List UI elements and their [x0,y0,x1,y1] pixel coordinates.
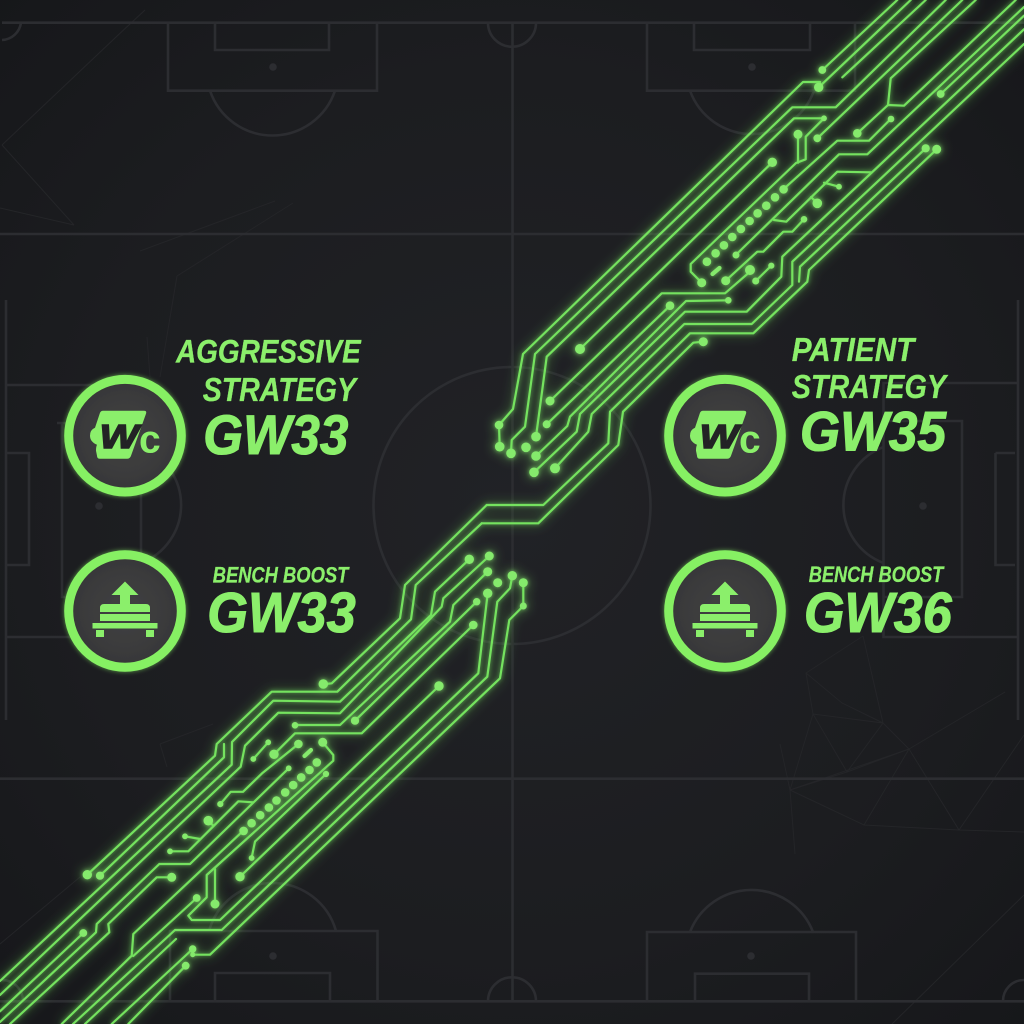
heading: strategy: STRATEGY [792,368,949,405]
icon: wildcard badge right: c [739,419,761,462]
icon: wildcard badge right [669,379,781,492]
icon: bench boost right [669,555,781,667]
value: GW33 bench boost: GW33 [207,581,356,645]
value: GW35 wildcard: GW35 [800,400,947,462]
icon: wildcard badge left: W [100,418,142,455]
panel: aggressive bench boost [69,555,356,667]
heading: patient: PATIENT [792,331,917,368]
value: GW36 bench boost: GW36 [804,581,952,645]
icon: wildcard badge left: c [139,419,161,462]
upper right circuit nodes [495,67,944,477]
heading: aggressive: AGGRESSIVE [175,334,362,370]
upper right circuit traces [482,0,1024,523]
label: bench boost: BENCH BOOST [809,562,945,587]
icon: bench boost left [69,555,181,667]
label: bench boost: BENCH BOOST [213,562,350,588]
pitch penalty spots [95,63,927,960]
icon: wildcard badge right: W [700,418,742,455]
icon: wildcard badge left [69,379,181,492]
lower left circuit traces [0,505,523,1024]
panel: aggressive strategy wildcard [69,334,362,492]
heading: strategy: STRATEGY [203,371,359,408]
panel: patient bench boost [669,555,952,667]
value: GW33 wildcard: GW33 [203,403,348,466]
lower left circuit nodes [80,552,527,969]
panel: patient strategy wildcard [669,331,949,492]
